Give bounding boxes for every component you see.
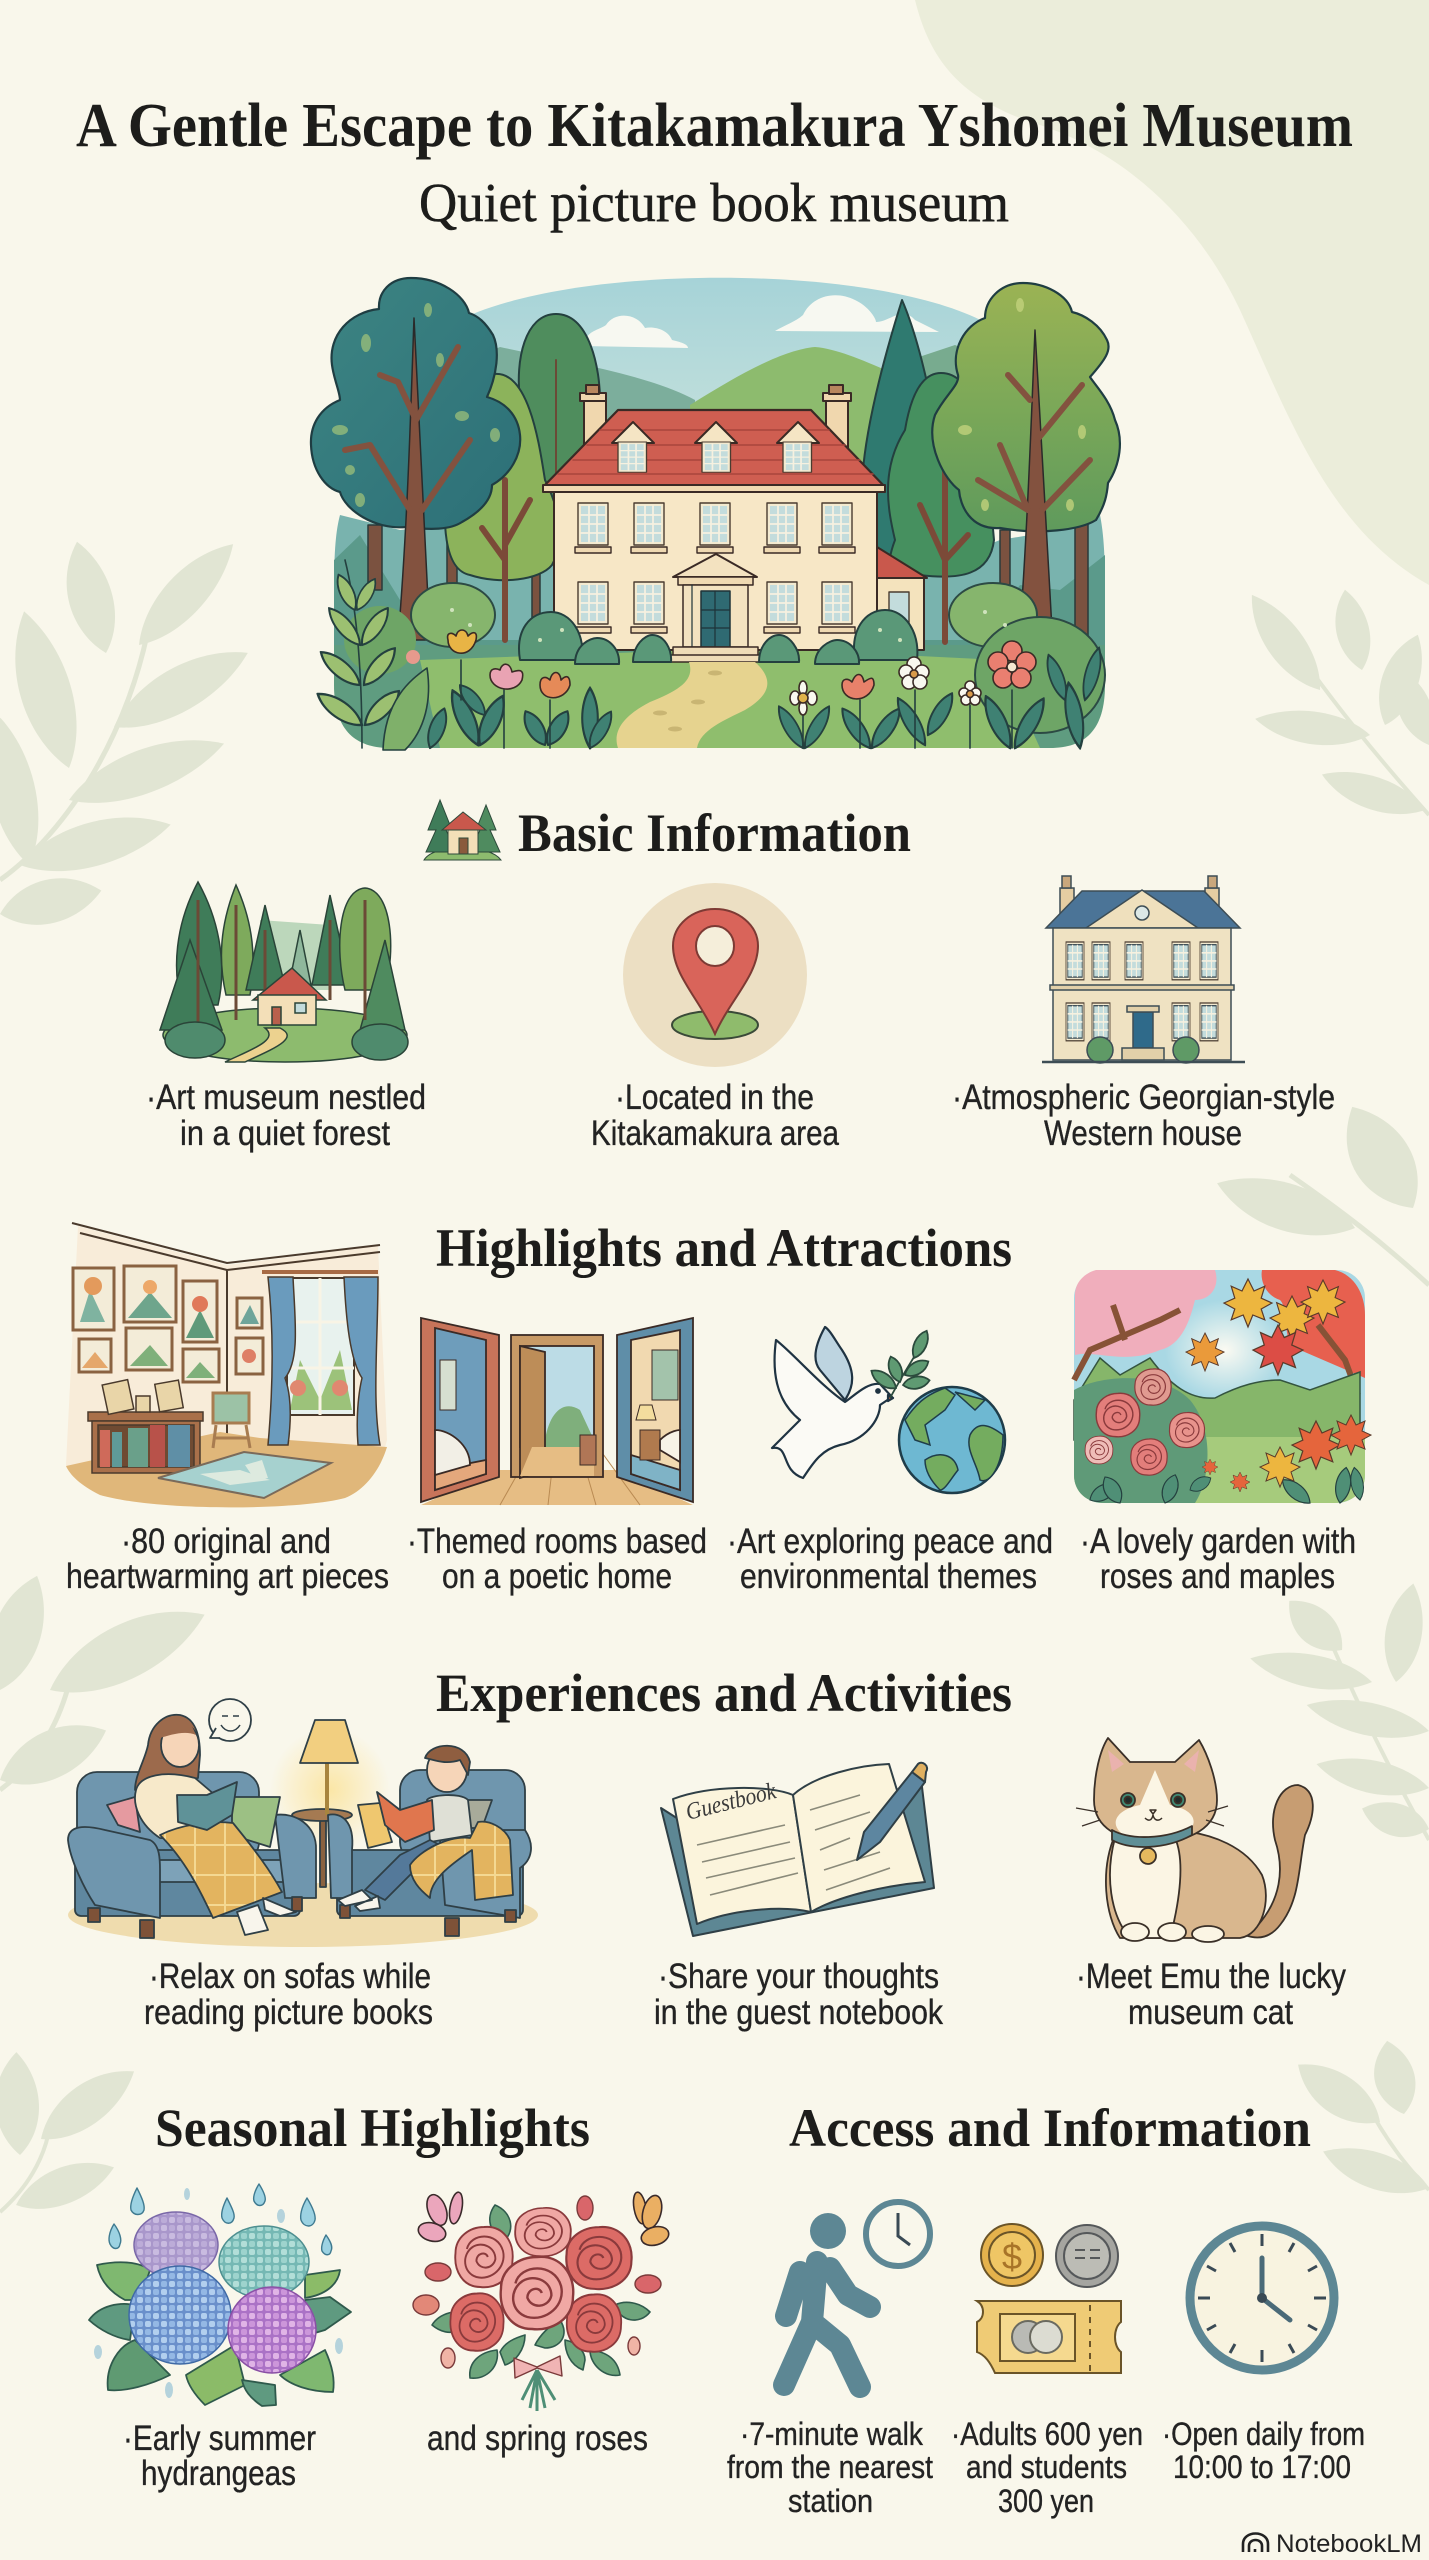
maple foliage xyxy=(1262,1270,1365,1378)
rose bush xyxy=(1074,1378,1208,1503)
left large tree xyxy=(311,278,520,640)
heading: Access and Information: Access and Information xyxy=(789,2098,1311,2158)
text: basic information items: ·Art museum nestled xyxy=(146,1078,426,1117)
text: basic information items: Western house xyxy=(1044,1114,1242,1153)
text: experiences items: ·Meet Emu the lucky xyxy=(1076,1957,1346,1996)
illustration: coins and ticket: $ xyxy=(1002,2236,1022,2277)
text: access items: from the nearest xyxy=(727,2449,933,2485)
text: access items: ·Open daily from xyxy=(1162,2416,1365,2452)
right large tree xyxy=(932,283,1120,630)
text: highlights items: ·A lovely garden with xyxy=(1080,1522,1356,1561)
illustration: themed room doors xyxy=(421,1318,693,1505)
portico and door xyxy=(670,554,760,662)
background leaves xyxy=(0,530,1429,2221)
text: highlights items: roses and maples xyxy=(1100,1557,1335,1596)
subtitle: Quiet picture book museum xyxy=(419,172,1009,233)
roses xyxy=(1085,1369,1205,1475)
ground xyxy=(334,645,1105,748)
text: experiences items: ·Share your thoughts xyxy=(658,1957,939,1996)
icon: forest house xyxy=(424,800,501,860)
text: seasonal items: and spring roses xyxy=(427,2419,648,2458)
text: basic information items: ·Atmospheric Georgian-style xyxy=(952,1078,1335,1117)
rear trunks xyxy=(368,520,1088,650)
left armchair xyxy=(68,1772,316,1918)
text: highlights items: environmental themes xyxy=(740,1557,1037,1596)
plants right xyxy=(773,646,1105,752)
lawn xyxy=(1074,1437,1365,1503)
text: access items: and students xyxy=(966,2449,1127,2485)
text: basic information items: in a quiet forest xyxy=(180,1114,390,1153)
text: basic information items: Kitakamakura area xyxy=(591,1114,839,1153)
text: highlights items: on a poetic home xyxy=(442,1557,672,1596)
text: experiences items: reading picture books xyxy=(144,1993,433,2032)
right mid tree xyxy=(888,373,994,642)
chimneys xyxy=(580,385,851,450)
text: access items: 300 yen xyxy=(998,2483,1094,2519)
illustration: wall clock xyxy=(1190,2226,1334,2370)
garden bushes xyxy=(519,610,917,664)
illustration: Emu the cat xyxy=(1076,1738,1313,1942)
bow xyxy=(514,2356,562,2378)
clouds xyxy=(583,295,939,348)
hero illustration: museum in the forest xyxy=(311,278,1120,752)
light left tree xyxy=(444,374,559,640)
plants left xyxy=(313,560,617,751)
illustration: guestbook xyxy=(661,1763,934,1936)
right armchair xyxy=(328,1770,525,1916)
flowers xyxy=(406,630,1036,715)
text: seasonal items: hydrangeas xyxy=(141,2454,296,2493)
maple leaves xyxy=(1186,1279,1371,1492)
text: access items: ·Adults 600 yen xyxy=(951,2416,1143,2452)
text: highlights items xyxy=(66,1522,1356,1596)
back left tree xyxy=(512,314,600,560)
house body xyxy=(543,485,885,650)
text: seasonal items xyxy=(123,2419,648,2493)
roof xyxy=(543,410,885,487)
text: seasonal items: ·Early summer xyxy=(123,2419,316,2458)
speech bubble xyxy=(209,1699,251,1741)
illustration: Georgian house xyxy=(1042,876,1245,1063)
text: basic information items xyxy=(146,1078,1335,1153)
text: access items: 10:00 to 17:00 xyxy=(1173,2449,1351,2485)
icon: dove xyxy=(772,1327,893,1478)
text: basic information items: ·Located in the xyxy=(615,1078,814,1117)
text: access items xyxy=(727,2416,1365,2519)
illustration: walking person with clock xyxy=(784,2202,930,2387)
text: experiences items xyxy=(144,1957,1346,2032)
mountains xyxy=(470,347,695,560)
hedge xyxy=(1074,1358,1360,1440)
illustration: rose bouquet xyxy=(413,2191,671,2411)
side wing xyxy=(877,547,927,650)
illustration: reading on sofas xyxy=(68,1699,538,1947)
text: highlights items: ·Art exploring peace and xyxy=(727,1522,1053,1561)
illustration: rose and maple garden xyxy=(1074,1270,1371,1509)
illustration: dove and globe xyxy=(772,1327,1005,1493)
cherry tree foliage xyxy=(1075,1270,1216,1357)
icon: globe xyxy=(899,1387,1005,1493)
NotebookLM logo: NotebookLM xyxy=(1276,2530,1422,2558)
heading: Basic Information: Basic Information xyxy=(518,803,911,863)
heading: Seasonal Highlights: Seasonal Highlights xyxy=(155,2098,590,2158)
illustration: guestbook: Guestbook xyxy=(683,1778,779,1826)
illustration: coins and ticket xyxy=(977,2224,1121,2373)
text: highlights items: ·80 original and xyxy=(121,1522,331,1561)
sky xyxy=(450,278,990,620)
distant forest xyxy=(334,515,1105,680)
text: experiences items: museum cat xyxy=(1128,1993,1293,2032)
text: highlights items: heartwarming art pieces xyxy=(66,1557,389,1596)
text: experiences items: in the guest notebook xyxy=(654,1993,943,2032)
cypress xyxy=(862,300,935,556)
illustration: hydrangeas xyxy=(89,2184,351,2406)
icon: olive branch xyxy=(868,1328,932,1398)
butterflies xyxy=(416,2191,671,2248)
boy xyxy=(338,1746,472,1911)
light bushes xyxy=(411,583,495,647)
heading: Experiences and Activities: Experiences and Activities xyxy=(436,1663,1012,1723)
illustration: forest with cottage xyxy=(160,882,408,1062)
lamp and side table xyxy=(292,1720,358,1887)
text: experiences items: ·Relax on sofas while xyxy=(149,1957,431,1996)
heading: Highlights and Attractions: Highlights and Attractions xyxy=(436,1218,1012,1278)
illustration: gallery room xyxy=(66,1223,387,1507)
decorative corner blob xyxy=(915,0,1429,585)
dormers xyxy=(612,422,819,472)
text: access items: station xyxy=(788,2483,873,2519)
woman xyxy=(135,1715,296,1935)
illustration: location pin xyxy=(623,883,807,1067)
garden path xyxy=(617,662,767,748)
text: highlights items: ·Themed rooms based xyxy=(407,1522,707,1561)
text: access items: ·7-minute walk xyxy=(740,2416,924,2452)
